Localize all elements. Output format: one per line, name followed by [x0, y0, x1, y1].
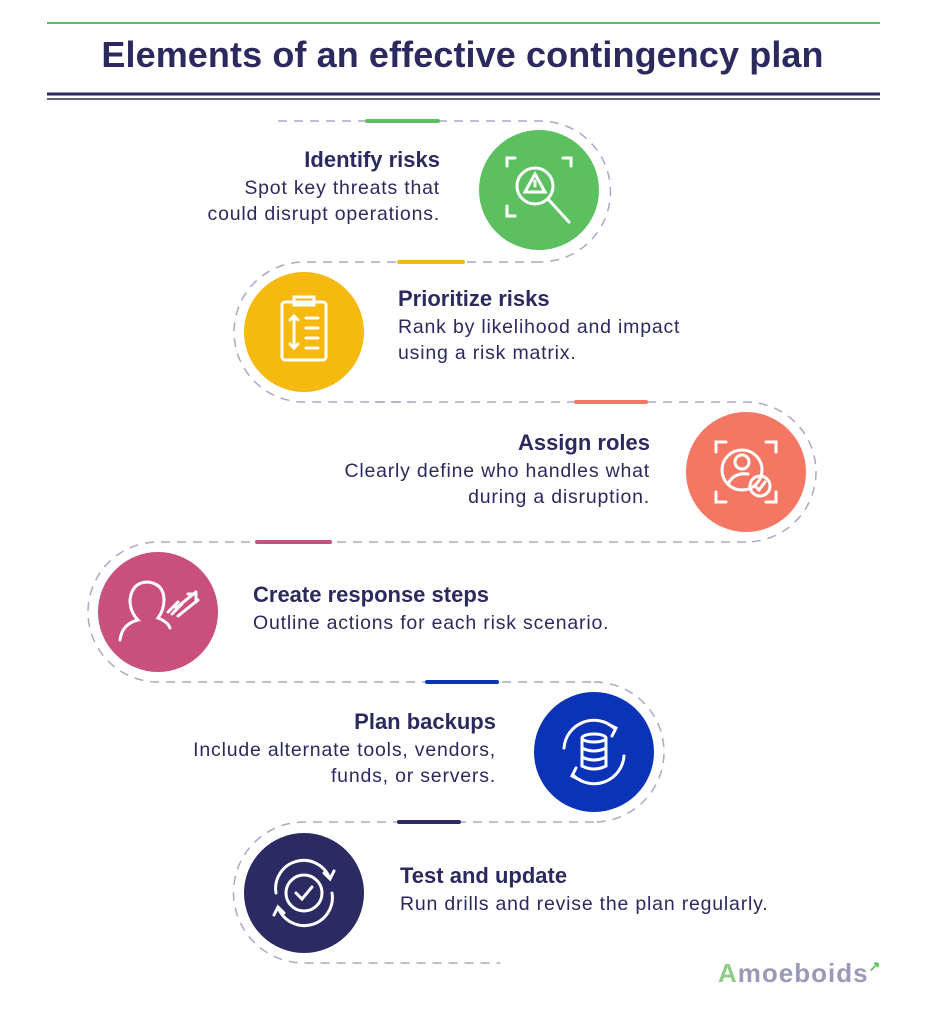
text: create response steps: Outline actions for each risk scenario.: [253, 612, 609, 634]
logo: Amoeboids↗: [718, 958, 881, 988]
icon: prioritize risks: [244, 272, 364, 392]
text: identify risks: Spot key threats that: [244, 177, 440, 199]
text: prioritize risks: [398, 286, 680, 364]
text: assign roles: [344, 430, 650, 508]
text: assign roles: Assign roles: [518, 430, 650, 455]
icon: identify risks: [479, 130, 599, 250]
text: test and update: Test and update: [400, 863, 567, 888]
text: test and update: Run drills and revise the plan regularly.: [400, 893, 768, 915]
title: Elements of an effective contingency plan: [101, 34, 824, 75]
text: prioritize risks: Prioritize risks: [398, 286, 550, 311]
icon: plan backups: [534, 692, 654, 812]
text: identify risks: Identify risks: [304, 147, 440, 172]
text: prioritize risks: using a risk matrix.: [398, 342, 577, 364]
text: plan backups: Plan backups: [354, 709, 496, 734]
text: identify risks: [208, 147, 440, 225]
text: prioritize risks: Rank by likelihood and impact: [398, 316, 680, 338]
text: plan backups: Include alternate tools, vendors,: [193, 739, 496, 761]
icon: test and update: [244, 833, 364, 953]
text: plan backups: [193, 709, 496, 787]
text: assign roles: Clearly define who handles what: [344, 460, 650, 482]
text: create response steps: [253, 582, 609, 634]
icon: assign roles: [686, 412, 806, 532]
text: assign roles: during a disruption.: [468, 486, 650, 508]
icon: create response steps: [98, 552, 218, 672]
text: create response steps: Create response steps: [253, 582, 489, 607]
text: test and update: [400, 863, 768, 915]
text: identify risks: could disrupt operations.: [208, 203, 440, 225]
text: plan backups: funds, or servers.: [331, 765, 496, 787]
